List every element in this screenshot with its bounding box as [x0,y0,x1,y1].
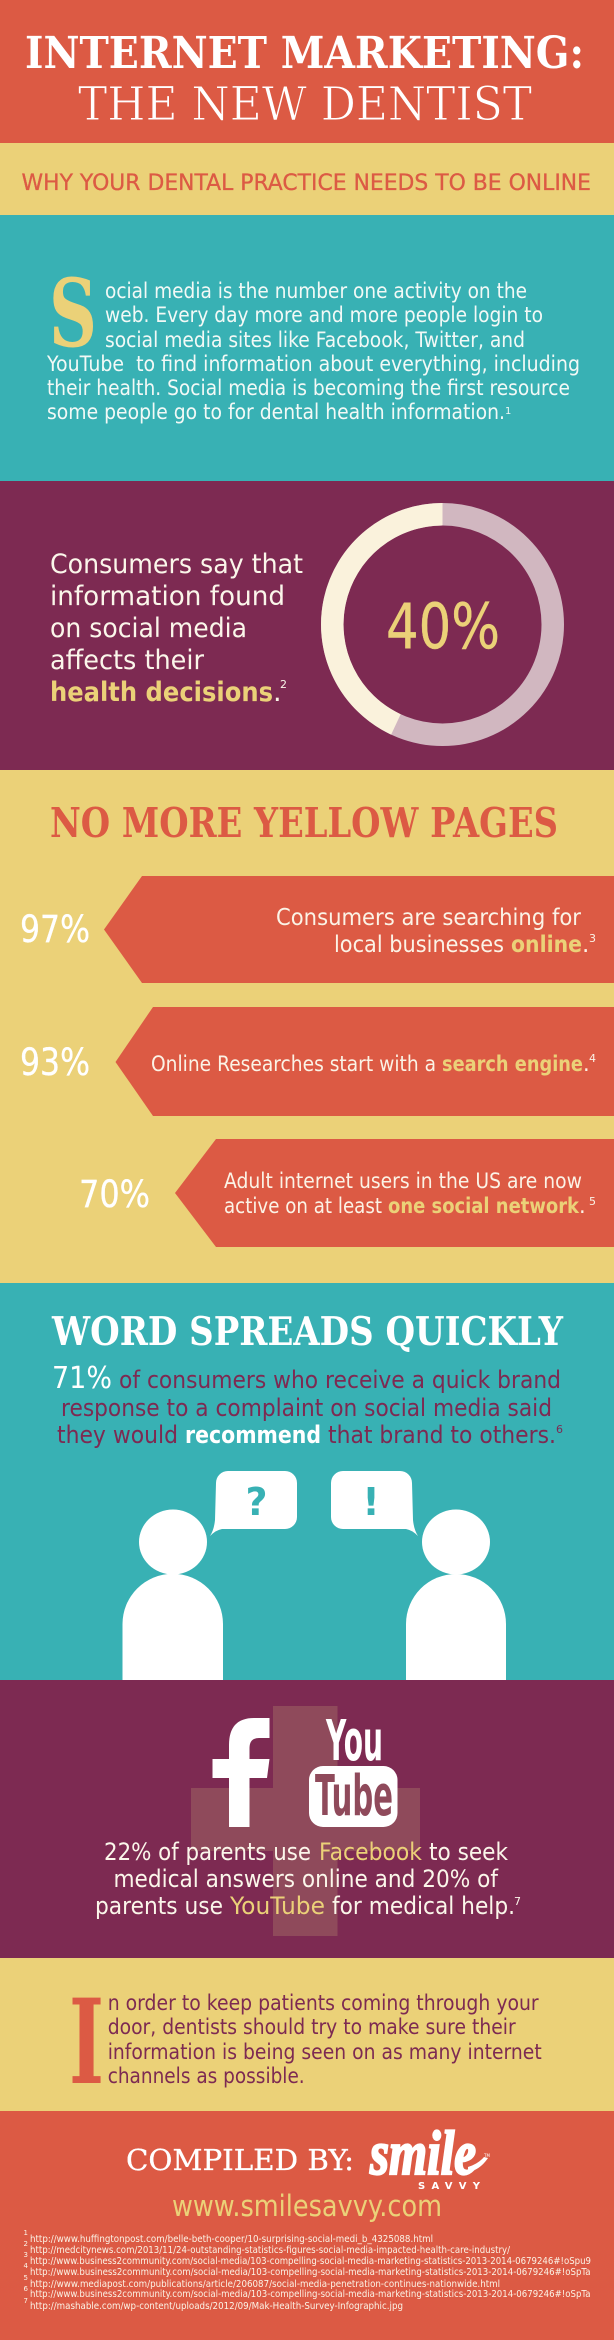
stat row 97%: local businesses [334,932,504,958]
intro paragraph: 1 [505,406,511,417]
statistic paragraph: that brand to others. [328,1421,556,1449]
logo: smile savvy: TM [483,2153,490,2158]
references: 5 [24,2274,28,2282]
references: http://mashable.com/wp-content/uploads/2012/09/Mak-Health-Survey-Infographic.jpg [30,2301,403,2312]
statement text: . [273,677,282,708]
closing paragraph: n order to keep patients coming through your [108,1991,539,2015]
person left with question bubble: ? [245,1480,268,1524]
facebook youtube text: 22% of parents use [104,1838,311,1866]
closing paragraph [108,1991,542,2088]
intro paragraph: ocial media is the number one activity on the [105,279,527,303]
statistic paragraph [52,1361,563,1449]
statistic paragraph: 71% [52,1361,112,1396]
icon: facebook f [212,1718,270,1827]
stat row 70%: Adult internet users in the US are now [224,1169,582,1193]
statistic paragraph: recommend [185,1421,321,1449]
references: 7 [24,2297,28,2305]
title line 2: THE NEW DENTIST [78,77,532,132]
stat row 93%: . [583,1052,590,1076]
statement text: Consumers say that [50,549,303,580]
facebook youtube text: parents use [95,1892,223,1920]
statement text: information found [50,581,285,612]
statement text: health decisions [50,677,273,708]
facebook youtube text: to seek [429,1838,508,1866]
closing paragraph: channels as possible. [108,2064,305,2088]
donut value: 40% [386,590,500,663]
stat row 70%: . [579,1194,586,1218]
statistic paragraph: they would [57,1421,178,1449]
stat row 70%: active on at least [224,1194,382,1218]
references: http://www.mediapost.com/publications/article/206087/social-media-penetration-continues-nationwide.html [30,2279,500,2290]
references [24,2229,591,2312]
stat row 97%: 3 [589,932,596,945]
stat row 93%: 4 [589,1052,596,1065]
stat row 93% [20,1007,614,1116]
intro paragraph: social media sites like Facebook, Twitter, and [105,328,525,352]
facebook youtube text: for medical help. [332,1892,515,1920]
stat row 97%: Consumers are searching for [276,905,581,931]
references: 6 [24,2285,28,2293]
references: 2 [24,2240,28,2248]
references: 4 [24,2262,28,2270]
statistic paragraph: of consumers who receive a quick brand [119,1366,561,1394]
statement text: affects their [50,645,205,676]
facebook youtube text: YouTube [229,1892,325,1920]
intro paragraph: web. Every day more and more people login to [105,303,543,327]
statement text [50,549,303,708]
compiled by: COMPILED BY: [126,2143,354,2177]
references: http://medcitynews.com/2013/11/24-outstanding-statistics-figures-social-media-impacted-health-care-industry/ [30,2245,511,2256]
panel: health decisions [0,481,614,770]
panel: closing statement [0,1958,614,2111]
stat row 70%: 5 [589,1195,596,1208]
subtitle: WHY YOUR DENTAL PRACTICE NEEDS TO BE ONLINE [22,171,591,196]
icon: youtube logo [309,1709,398,1829]
facebook youtube text: 7 [514,1895,521,1908]
stat row 97%: online [511,932,582,958]
panel: facebook and youtube [0,1680,614,1958]
references: 3 [24,2251,28,2259]
facebook youtube text [95,1838,521,1920]
statistic paragraph: response to a complaint on social media said [61,1394,552,1422]
stat row 97%: . [582,932,589,958]
panel: footer [0,2111,614,2340]
references: 1 [24,2229,28,2237]
stat row 93%: Online Researches start with a [151,1052,436,1076]
intro paragraph: some people go to for dental health information. [47,400,505,424]
stat row 70%: one social network [388,1194,580,1218]
intro paragraph [46,279,580,424]
panel: subtitle band [0,143,614,215]
statement text: 2 [280,678,287,691]
drop cap I: I [69,1973,104,2111]
panel: intro [0,215,614,481]
closing paragraph: information is being seen on as many internet [108,2040,542,2064]
stat row 97%: 97% [20,908,90,951]
statement text: on social media [50,613,247,644]
closing paragraph: door, dentists should try to make sure their [108,2015,516,2039]
logo: smile savvy: SAVVY [418,2181,481,2192]
person right with exclamation bubble: ! [362,1480,380,1524]
background medical cross [191,1706,420,1936]
icon: youtube logo: You [325,1709,383,1774]
donut chart 40% [332,514,553,735]
website: www.smilesavvy.com [172,2189,442,2223]
logo: smile savvy: smile [369,2120,476,2188]
drop cap S: S [49,259,97,369]
stat row 93%: search engine [442,1052,583,1076]
facebook youtube text: Facebook [319,1838,422,1866]
stat row 70%: 70% [79,1173,150,1216]
panel: header [0,0,614,143]
icon: youtube logo: Tube [315,1764,393,1829]
statistic paragraph: 6 [556,1423,563,1436]
panel: no more yellow pages [0,770,614,1283]
stat row 97% [20,876,614,983]
facebook youtube text: medical answers online and 20% of [114,1865,498,1893]
person right with exclamation bubble [331,1471,506,1680]
stat row 93%: 93% [20,1041,90,1084]
panel: word spreads quickly [0,1283,614,1680]
stat row 70% [79,1139,614,1247]
person left with question bubble [122,1471,297,1680]
references: http://www.huffingtonpost.com/belle-beth-cooper/10-surprising-social-medi_b_4325088.html [30,2234,433,2245]
